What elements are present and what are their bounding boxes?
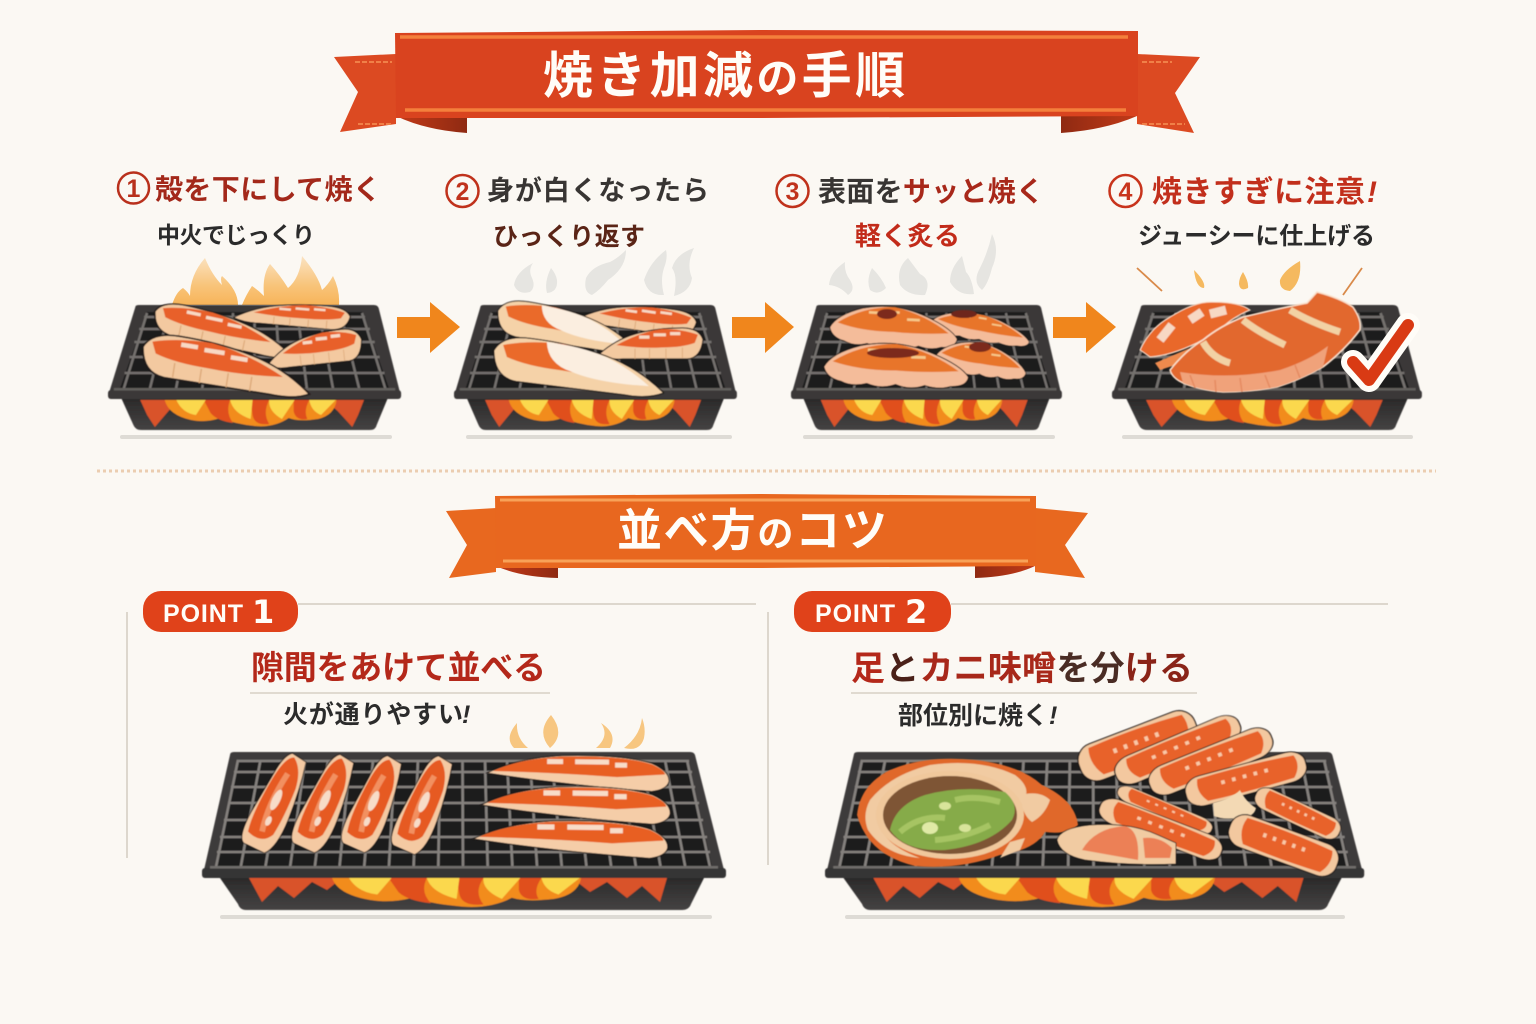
point 1 badge: 1: [252, 593, 274, 631]
step 2 steam: [514, 248, 694, 296]
grill shadow: [120, 435, 392, 439]
step 3 subtext: 軽く炙る: [855, 221, 960, 251]
dotted divider: [97, 470, 1436, 472]
step 1 background flames: [172, 256, 339, 305]
step 2 heading: 身が白くなったら: [487, 175, 709, 206]
point 2 badge: [794, 591, 951, 632]
grill shadow: [803, 435, 1055, 439]
step 3 grill: [791, 305, 1062, 430]
grill shadow: [466, 435, 732, 439]
step 3 steam: [829, 234, 996, 295]
step 2 grill: [454, 305, 737, 430]
point 2 subtext: 部位別に焼く: [898, 702, 1048, 730]
step 3 crab legs: [823, 304, 1033, 390]
point 1 subtext: !: [462, 701, 470, 729]
banner: 並べ方のコツ: 並べ方のコツ: [617, 505, 887, 556]
step 1 subtext: 中火でじっくり: [157, 222, 315, 248]
step 4 grill: [1112, 305, 1422, 430]
step 4 heading: 焼きすぎに注意: [1152, 176, 1365, 209]
step 4 sizzle sparks: [1137, 261, 1362, 295]
arrow 2: [732, 302, 794, 353]
step 1 grill: [108, 305, 401, 430]
arrow 3: [1053, 302, 1116, 353]
grill: [202, 752, 726, 910]
step 2 heading: 2: [456, 178, 469, 206]
point 2 subtext: !: [1049, 702, 1057, 730]
step 1 heading: 殻を下にして焼く: [155, 174, 381, 205]
grill shadow: [220, 915, 712, 919]
step 3 heading: 3: [786, 178, 799, 206]
point 1 badge: [143, 591, 298, 632]
grill shadow: [845, 915, 1345, 919]
step 1 crab legs: [139, 298, 364, 401]
point 2 badge: POINT: [815, 600, 895, 628]
panel frame lines: [768, 604, 1388, 865]
step 1 heading: 1: [127, 175, 141, 203]
small flames: [510, 715, 645, 749]
step 2 subtext: ひっくり返す: [493, 223, 645, 251]
step 4 check mark: [1353, 325, 1408, 380]
panel frame lines: [127, 604, 756, 858]
panel: point 1: [127, 591, 756, 919]
banner: 焼き加減の手順: [334, 30, 1200, 133]
arrow 1: [397, 302, 460, 353]
grill: [825, 752, 1364, 910]
evenly spaced crab legs: [237, 748, 671, 858]
point 2 heading: 足とカニ味噌を分ける: [851, 650, 1193, 688]
step 4 crab meat: [1140, 292, 1360, 392]
step 2 crab legs: [490, 297, 703, 400]
banner: 並べ方のコツ: [446, 494, 1088, 578]
banner: 焼き加減の手順: 焼き加減の手順: [543, 48, 905, 104]
point 1 subtext: 火が通りやすい: [283, 700, 463, 729]
grill shadow: [1122, 435, 1413, 439]
point 1 heading: 隙間をあけて並べる: [251, 649, 546, 686]
crab shell with miso: [857, 759, 1078, 867]
point 1 badge: POINT: [163, 600, 243, 628]
step 4 heading: !: [1367, 176, 1377, 209]
step 4 subtext: ジューシーに仕上げる: [1138, 223, 1375, 250]
point 2 badge: 2: [905, 593, 927, 631]
crab leg sections: [1057, 783, 1344, 881]
panel: point 2: [768, 591, 1388, 919]
crab legs piled: [1073, 706, 1310, 810]
step 3 heading: 表面をサッと焼く: [818, 176, 1044, 207]
step 4 heading: 4: [1119, 178, 1133, 206]
